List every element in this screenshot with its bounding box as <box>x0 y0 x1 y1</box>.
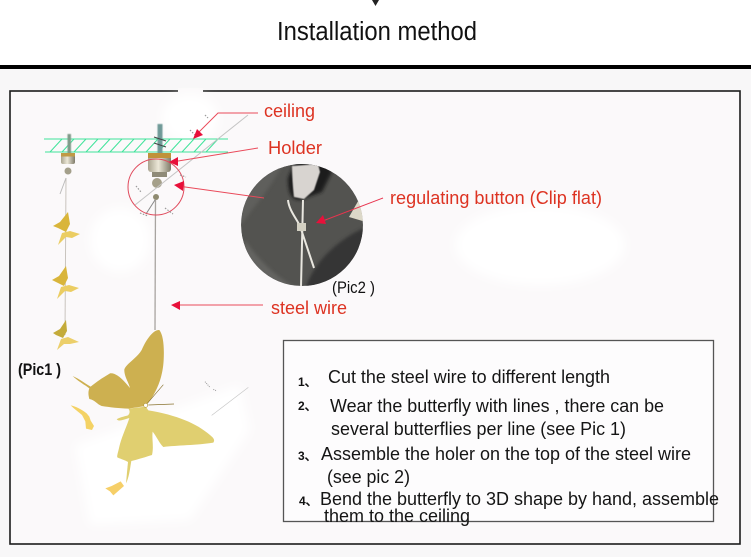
step 4: 4、 <box>299 494 318 508</box>
left hanging wire with small butterflies <box>52 134 80 350</box>
arrow: holder <box>169 148 258 166</box>
label: regulating button: regulating button (Clip flat) <box>390 188 602 208</box>
step 4 <box>299 488 719 526</box>
arrow: ceiling <box>193 113 258 139</box>
step 4: them to the ceiling <box>324 505 470 526</box>
step 2: several butterflies per line (see Pic 1) <box>331 418 626 439</box>
label: Holder: Holder <box>268 138 322 158</box>
header divider bar <box>0 65 751 69</box>
arrow: regulating button <box>316 198 383 224</box>
arrow: steel wire <box>171 301 263 310</box>
step 4: Bend the butterfly to 3D shape by hand, assemble <box>320 488 719 509</box>
photo circle: pic 2 <box>241 164 363 286</box>
step 3: 3、 <box>298 449 317 463</box>
step 3: Assemble the holer on the top of the steel wire <box>321 443 691 464</box>
label: Pic2: (Pic2 ) <box>332 278 375 297</box>
small down marker <box>372 0 379 6</box>
step 2 <box>298 395 664 439</box>
label: steel wire: steel wire <box>271 298 347 318</box>
step 3: (see pic 2) <box>327 466 410 487</box>
title: Installation method <box>277 18 477 46</box>
step 1: Cut the steel wire to different length <box>328 366 610 387</box>
label: ceiling: ceiling <box>264 101 315 121</box>
step 3 <box>298 443 691 487</box>
instructions box <box>284 340 719 526</box>
large butterfly <box>71 330 248 495</box>
main panel <box>10 88 740 544</box>
holder with screw and detail circle <box>128 115 248 330</box>
ceiling hatch <box>44 139 228 152</box>
arrow: detail circle <box>174 181 264 198</box>
step 2: Wear the butterfly with lines , there can be <box>330 395 664 416</box>
step 1: 1、 <box>298 375 317 389</box>
step 2: 2、 <box>298 399 317 413</box>
label: Pic1: (Pic1 ) <box>18 360 61 379</box>
